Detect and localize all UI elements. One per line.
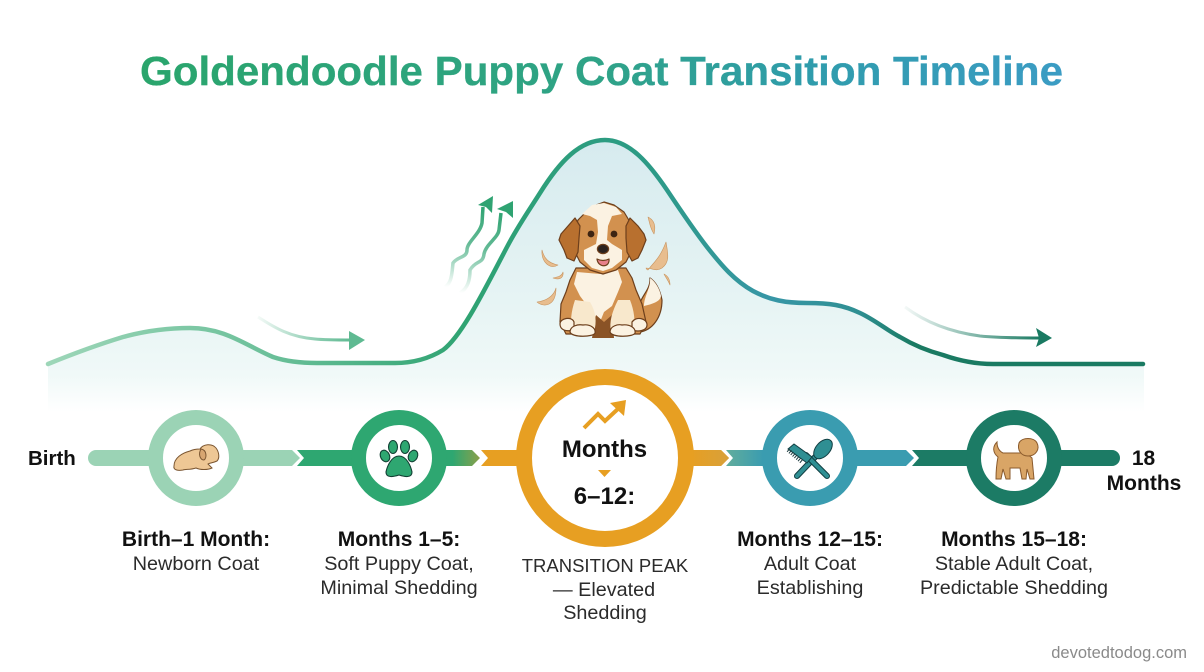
timeline segment 3 [481,450,729,466]
caption: Months 12–15: Months 12–15: [737,528,883,551]
puppy head [574,202,634,274]
icon: small down marker [598,470,611,477]
puppy front paws [570,325,635,336]
icon: shedding puppy [537,202,670,338]
caption: Months 1–5: Months 1–5: [338,528,460,551]
milestone: soft puppy coat [358,418,440,498]
title: Goldendoodle Puppy Coat Transition Timeline [140,48,1063,94]
caption: transition peak: TRANSITION PEAK [522,555,689,576]
caption: Months 12–15 [737,528,883,599]
shedding intensity curve [48,140,1143,364]
puppy nose [597,244,609,254]
milestone: transition peak [524,377,686,539]
milestone: stable adult coat [974,418,1054,498]
caption: transition peak: Shedding [563,602,647,624]
puppy hind paws [560,318,647,331]
label: Birth: Birth [28,447,76,470]
timeline segment 5 [912,450,1120,466]
caption: Months 15–18 [920,528,1108,599]
milestone: newborn [156,418,236,498]
puppy tail tip [644,278,661,306]
puppy tongue [597,259,609,266]
caption: Months 15–18: Months 15–18: [941,528,1087,551]
label: 6–12: 6–12: [574,483,635,510]
caption: Birth–1 Month: Newborn Coat [133,553,260,575]
caption: Birth–1 Month: Birth–1 Month: [122,528,270,551]
icon: newborn puppy [174,445,219,470]
caption: Birth–1 Month [122,528,270,575]
icon: comb and brush [788,436,836,476]
caption: Months 1–5: Soft Puppy Coat, [324,553,474,575]
fur tufts [537,217,670,305]
puppy front legs [571,300,634,332]
caption: Months 12–15: Adult Coat [764,553,857,575]
caption: transition peak [522,555,689,624]
label: 18 Months: 18 [1132,447,1155,470]
icon: rising trend arrow [584,400,626,428]
icon: paw print [378,440,420,477]
timeline segment 4 [726,450,914,466]
caption: transition peak: — Elevated [553,579,655,601]
caption: Months 15–18: Predictable Shedding [920,577,1108,599]
caption: Months 12–15: Establishing [757,577,863,599]
milestone: adult coat [770,418,850,498]
caption: Months 1–5 [320,528,478,599]
icon: adult goldendoodle [994,438,1038,479]
timeline segment 2 [297,450,480,466]
timeline segment 3 end [690,450,729,466]
puppy tail [638,278,662,332]
puppy blaze [582,203,622,271]
puppy chest [574,270,622,322]
puppy belly [592,315,614,338]
arrow: decline [905,307,1052,347]
puppy eyes [588,231,617,237]
arrow: gentle rise [258,317,365,350]
puppy ears [559,218,646,261]
shedding curve area fill [48,140,1144,412]
puppy body [560,268,646,334]
caption: Months 1–5: Minimal Shedding [320,577,478,599]
source credit: devotedtodog.com [1051,644,1187,662]
label: 18 Months: Months [1107,472,1181,495]
caption: Months 15–18: Stable Adult Coat, [935,553,1093,575]
label: Months: Months [562,436,647,463]
timeline segment 1 [88,450,300,466]
arrows: rapid shedding increase [445,196,513,293]
